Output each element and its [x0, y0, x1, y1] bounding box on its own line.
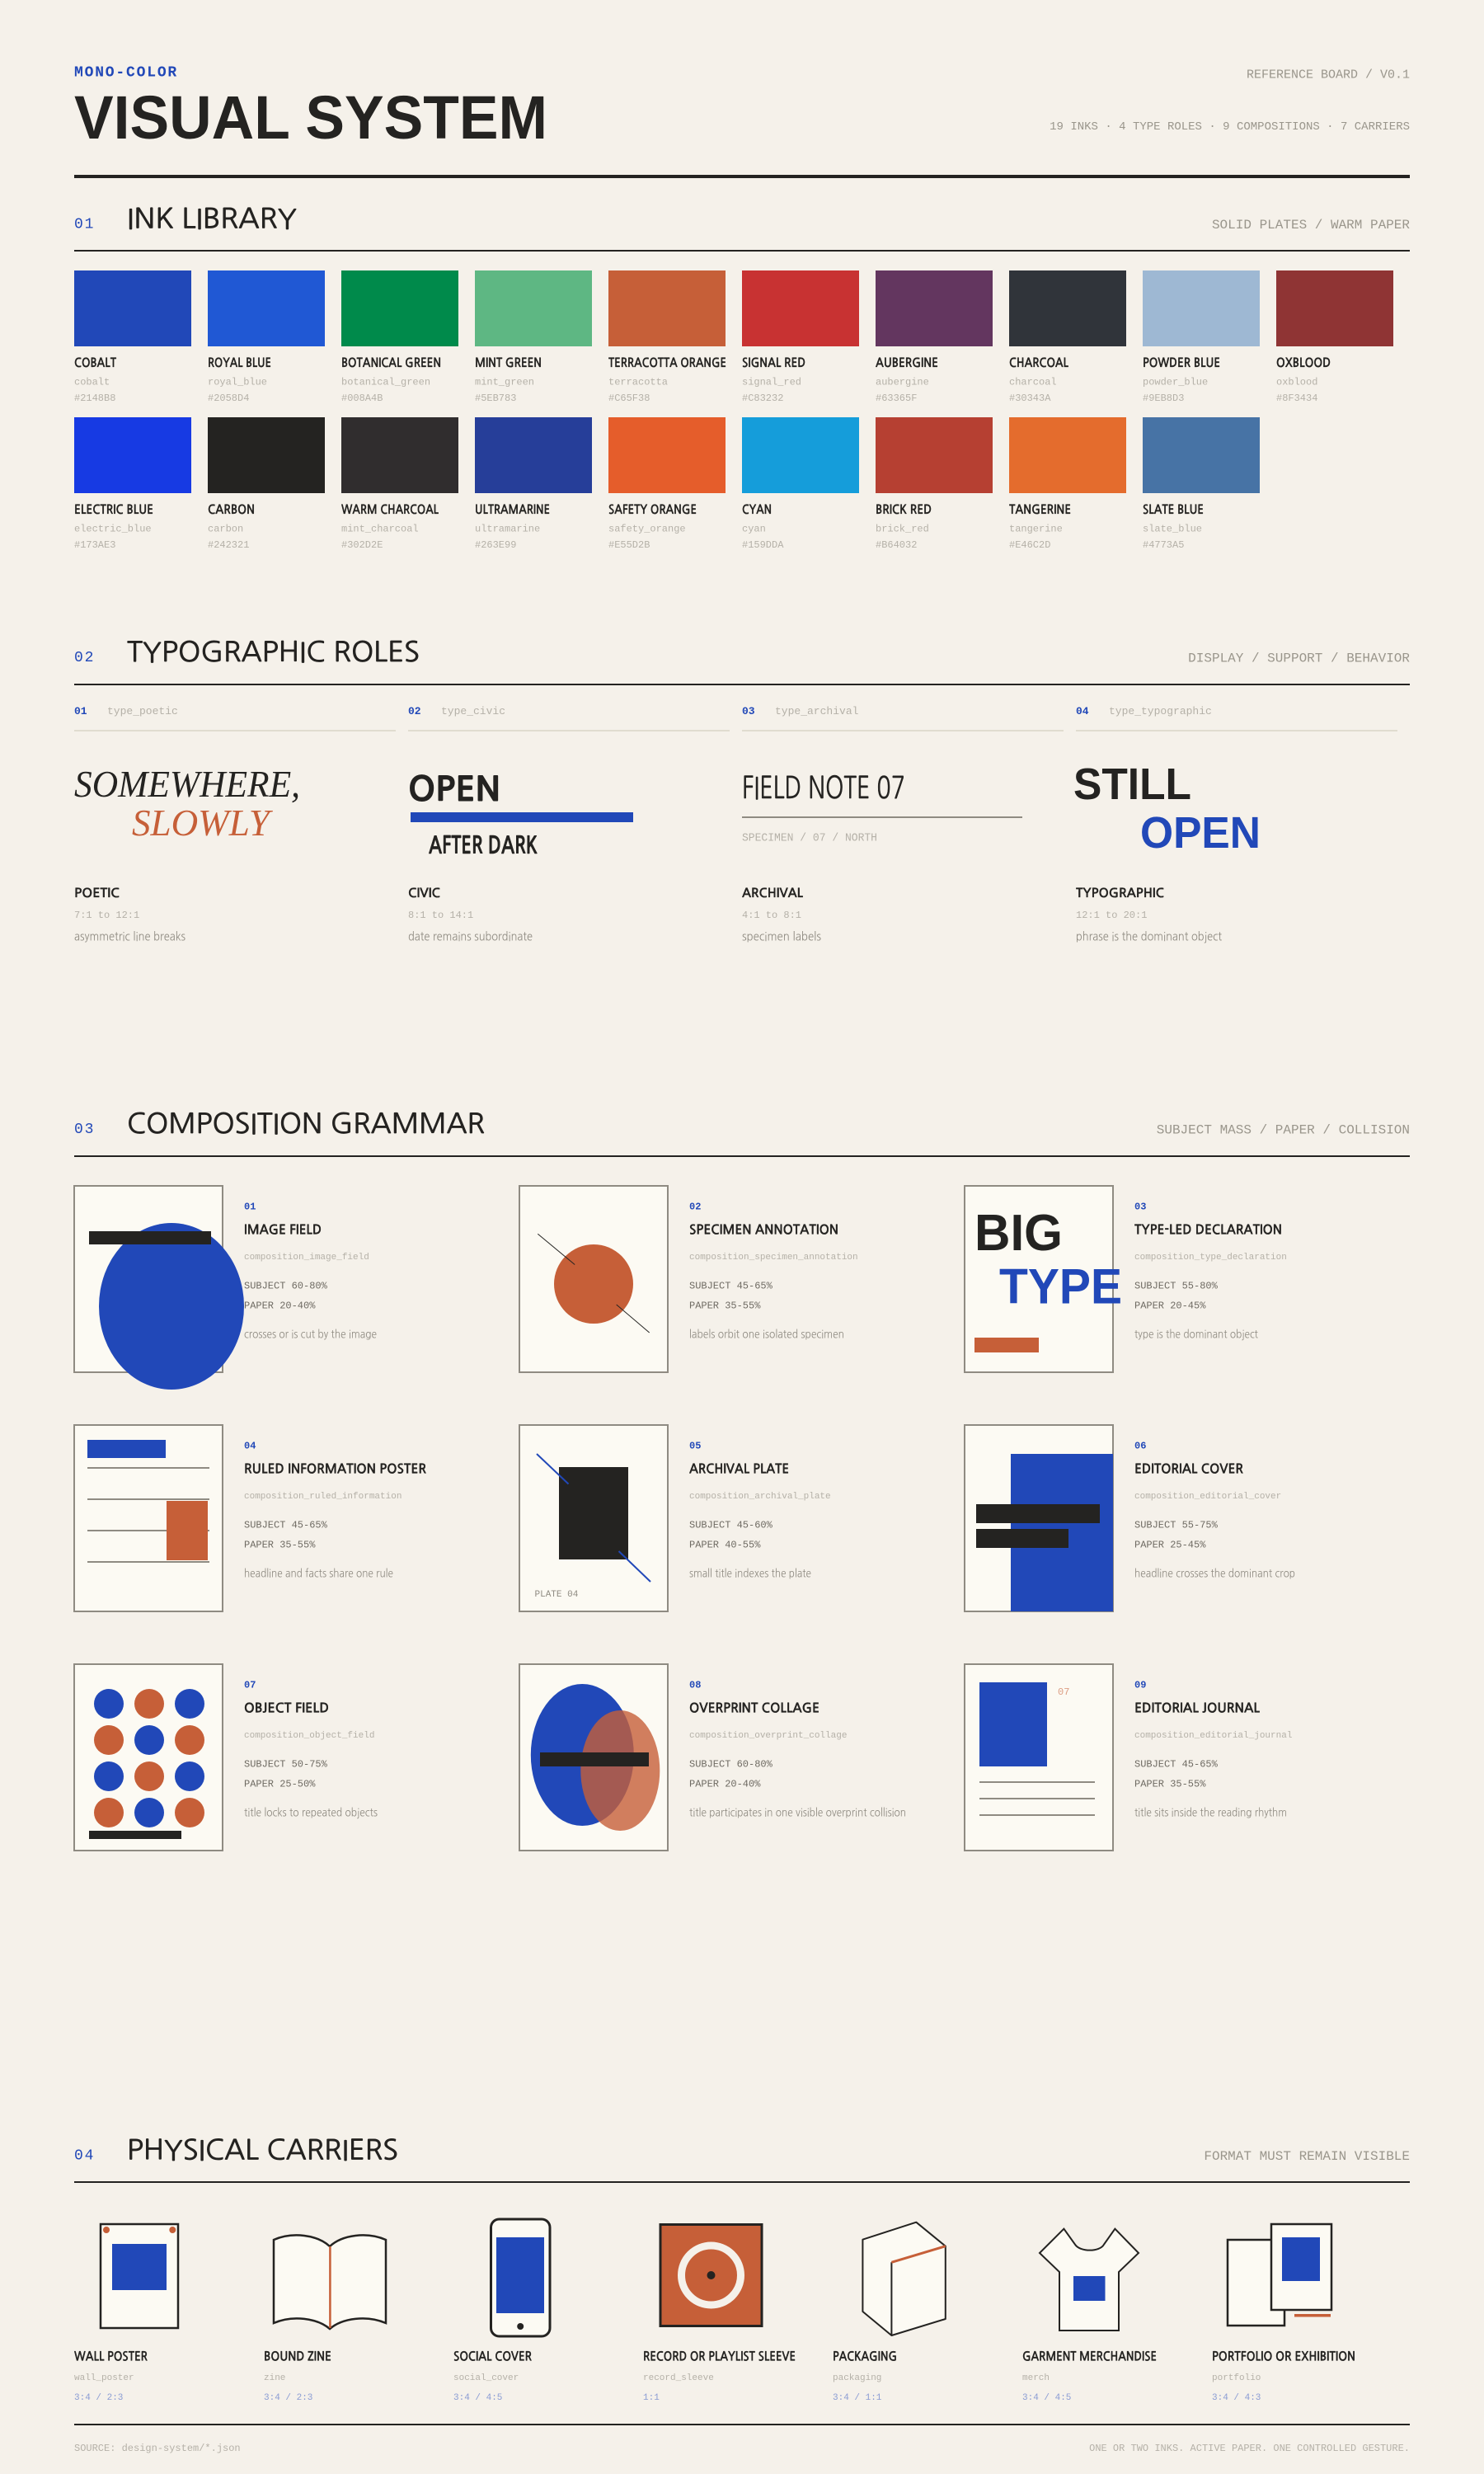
panel: composition 04 ruled information poster: headline and facts share one rule	[244, 1568, 393, 1578]
swatch: cyan	[742, 417, 859, 551]
swatch: botanical green	[341, 270, 458, 404]
swatch: electric blue: ELECTRIC BLUE	[74, 504, 153, 516]
panel: composition 05 archival plate: 05	[689, 1440, 701, 1451]
panel: composition 04 ruled information poster: RULED INFORMATION POSTER	[244, 1464, 426, 1476]
panel: composition 08 overprint collage: PAPER 20-40%	[689, 1778, 761, 1790]
swatch: aubergine	[876, 270, 993, 404]
swatch: mint green	[475, 270, 592, 404]
swatch: charcoal: #30343A	[1009, 393, 1051, 404]
panel: type role typographic: 12:1 to 20:1	[1076, 910, 1147, 921]
panel: type role poetic: type_poetic	[107, 705, 178, 717]
swatch: carbon: #242321	[208, 539, 249, 551]
swatch: oxblood: OXBLOOD	[1276, 357, 1331, 369]
swatch: charcoal	[1009, 270, 1126, 404]
specimen: field note 07	[742, 773, 1022, 844]
panel: type role civic: type_civic	[441, 705, 505, 717]
section heading: physical carriers	[74, 2136, 1410, 2164]
panel: composition 03 type-led declaration: SUBJECT 55-80%	[1134, 1280, 1219, 1291]
panel: composition 04 ruled information poster	[74, 1425, 426, 1611]
panel: type role civic: CIVIC	[408, 887, 440, 900]
panel: type role archival	[742, 705, 1064, 943]
panel: type role poetic	[74, 705, 396, 943]
specimen: somewhere slowly: SLOWLY	[132, 802, 273, 844]
panel: type role civic: 8:1 to 14:1	[408, 910, 473, 921]
panel: carrier bound zine: 3:4 / 2:3	[264, 2393, 312, 2403]
swatch: oxblood: oxblood	[1276, 376, 1317, 388]
panel: composition 02 specimen annotation: labels orbit one isolated specimen	[689, 1329, 844, 1339]
section heading: typographic roles: TYPOGRAPHIC ROLES	[127, 638, 420, 666]
swatch: slate blue	[1143, 417, 1260, 551]
swatch: slate blue: #4773A5	[1143, 539, 1184, 551]
panel: composition 05 archival plate: composition_archival_plate	[689, 1492, 831, 1502]
specimen: field note 07: FIELD NOTE 07	[742, 773, 905, 803]
panel: type role civic	[408, 705, 730, 943]
panel: type role poetic: POETIC	[74, 887, 120, 900]
swatch: brick red: BRICK RED	[876, 504, 932, 516]
swatch: royal blue	[208, 270, 325, 404]
section heading: typographic roles: DISPLAY / SUPPORT / BEHAVIOR	[1188, 651, 1410, 666]
panel: carrier garment merchandise: GARMENT MERCHANDISE	[1022, 2351, 1157, 2363]
thumbnail: editorial cover	[965, 1425, 1113, 1611]
panel: composition 03 type-led declaration: composition_type_declaration	[1134, 1253, 1287, 1263]
panel: composition 01 image field: crosses or is cut by the image	[244, 1329, 377, 1339]
panel: carrier social cover	[453, 2219, 550, 2403]
swatch: warm charcoal: #302D2E	[341, 539, 383, 551]
swatch: mint green: MINT GREEN	[475, 357, 542, 369]
swatch: signal red: signal_red	[742, 376, 801, 388]
specimen: open after dark: AFTER DARK	[429, 835, 538, 858]
panel: composition 03 type-led declaration: 03	[1134, 1201, 1146, 1212]
panel: composition 05 archival plate: ARCHIVAL PLATE	[689, 1464, 789, 1476]
panel: carrier garment merchandise: merch	[1022, 2373, 1050, 2383]
panel: composition 07 object field: title locks to repeated objects	[244, 1807, 378, 1818]
swatch: mint green: mint_green	[475, 376, 534, 388]
section heading: composition grammar: COMPOSITION GRAMMAR	[127, 1110, 485, 1137]
section heading: composition grammar: SUBJECT MASS / PAPER / COLLISION	[1157, 1123, 1410, 1138]
panel: composition 02 specimen annotation: composition_specimen_annotation	[689, 1253, 858, 1263]
panel: carrier record sleeve: record_sleeve	[643, 2373, 714, 2383]
eyebrow: mono-color: MONO-COLOR	[74, 64, 178, 81]
panel: type role poetic: asymmetric line breaks	[74, 930, 186, 943]
swatch: signal red	[742, 270, 859, 404]
panel: composition 02 specimen annotation: 02	[689, 1201, 701, 1212]
swatch: slate blue: SLATE BLUE	[1143, 504, 1204, 516]
swatch: electric blue: #173AE3	[74, 539, 115, 551]
swatch: powder blue: #9EB8D3	[1143, 393, 1184, 404]
thumbnail: archival plate	[519, 1425, 668, 1611]
swatch: cobalt: #2148B8	[74, 393, 115, 404]
swatch: ultramarine: #263E99	[475, 539, 516, 551]
swatch: charcoal: charcoal	[1009, 376, 1057, 388]
swatch: signal red: #C83232	[742, 393, 783, 404]
swatch: terracotta orange: #C65F38	[608, 393, 650, 404]
swatch: terracotta orange: TERRACOTTA ORANGE	[608, 357, 726, 369]
panel: composition 07 object field: 07	[244, 1679, 256, 1691]
section heading: ink library: 01	[74, 216, 95, 233]
swatch: botanical green: BOTANICAL GREEN	[341, 357, 441, 369]
panel: carrier wall poster	[74, 2224, 178, 2403]
panel: composition 01 image field: SUBJECT 60-80%	[244, 1280, 328, 1291]
panel: composition 01 image field: 01	[244, 1201, 256, 1212]
icon: bound zine	[274, 2235, 386, 2329]
swatch: terracotta orange: terracotta	[608, 376, 668, 388]
panel: carrier bound zine: zine	[264, 2373, 285, 2383]
swatch: carbon	[208, 417, 325, 551]
swatch: cobalt	[74, 270, 191, 404]
swatch: cobalt: cobalt	[74, 376, 110, 388]
swatch: cyan: CYAN	[742, 504, 772, 516]
panel: type role civic: 02	[408, 705, 421, 717]
swatch: brick red	[876, 417, 993, 551]
panel: carrier wall poster: wall_poster	[74, 2373, 134, 2383]
panel: type role archival: type_archival	[775, 705, 859, 717]
footer: ONE OR TWO INKS. ACTIVE PAPER. ONE CONTROLLED GESTURE.	[1089, 2443, 1410, 2454]
thumbnail: ruled information poster	[74, 1425, 223, 1611]
section heading: ink library: INK LIBRARY	[127, 205, 297, 233]
panel: composition 09 editorial journal: 09	[1134, 1679, 1146, 1691]
panel: composition 03 type-led declaration: TYPE-LED DECLARATION	[1134, 1225, 1282, 1237]
panel: type role typographic: TYPOGRAPHIC	[1076, 887, 1164, 900]
header	[74, 64, 1410, 152]
panel: composition 06 editorial cover	[965, 1425, 1295, 1611]
panel: composition 06 editorial cover: EDITORIAL COVER	[1134, 1464, 1243, 1476]
swatch: tangerine: TANGERINE	[1009, 504, 1071, 516]
section heading: typographic roles	[74, 638, 1410, 666]
panel: composition 08 overprint collage: 08	[689, 1679, 701, 1691]
panel: composition 08 overprint collage: SUBJECT 60-80%	[689, 1758, 773, 1770]
swatch: electric blue	[74, 417, 191, 551]
footer: SOURCE: design-system/*.json	[74, 2443, 241, 2454]
panel: carrier packaging: packaging	[833, 2373, 881, 2383]
icon: t-shirt	[1040, 2229, 1139, 2331]
thumbnail: type-led declaration	[965, 1186, 1122, 1372]
panel: carrier portfolio or exhibition: 3:4 / 4:3	[1212, 2393, 1261, 2403]
swatch: terracotta orange	[608, 270, 726, 404]
panel: composition 04 ruled information poster: SUBJECT 45-65%	[244, 1519, 328, 1531]
panel: ink swatches	[74, 270, 1393, 551]
specimen: still open: STILL	[1073, 760, 1191, 809]
swatch: warm charcoal: WARM CHARCOAL	[341, 504, 439, 516]
panel: carrier social cover: SOCIAL COVER	[453, 2351, 533, 2363]
icon: package box	[862, 2222, 946, 2335]
section heading: ink library: SOLID PLATES / WARM PAPER	[1212, 218, 1410, 233]
panel: composition 09 editorial journal: title sits inside the reading rhythm	[1134, 1807, 1287, 1818]
swatch: tangerine: tangerine	[1009, 523, 1063, 534]
swatch: tangerine: #E46C2D	[1009, 539, 1050, 551]
swatch: powder blue: powder_blue	[1143, 376, 1208, 388]
panel: composition 07 object field: OBJECT FIELD	[244, 1703, 329, 1715]
panel: carrier social cover: social_cover	[453, 2373, 519, 2383]
panel: type role archival: 4:1 to 8:1	[742, 910, 801, 921]
panel: composition 04 ruled information poster: composition_ruled_information	[244, 1492, 402, 1502]
panel: composition 05 archival plate	[519, 1425, 831, 1611]
panel: carrier wall poster: WALL POSTER	[74, 2351, 148, 2363]
panel: composition 06 editorial cover: PAPER 25-45%	[1134, 1539, 1206, 1550]
section heading: physical carriers: PHYSICAL CARRIERS	[127, 2136, 398, 2164]
swatch: brick red: #B64032	[876, 539, 917, 551]
thumbnail: archival plate: PLATE 04	[534, 1590, 579, 1600]
panel: carrier garment merchandise	[1022, 2229, 1157, 2403]
panel: carrier portfolio or exhibition: PORTFOLIO OR EXHIBITION	[1212, 2351, 1355, 2363]
section heading: composition grammar	[74, 1110, 1410, 1138]
panel: composition 02 specimen annotation: PAPER 35-55%	[689, 1300, 761, 1311]
panel: carrier bound zine	[264, 2235, 386, 2403]
section heading: ink library	[74, 205, 1410, 233]
icon: portfolio sheets	[1228, 2224, 1331, 2326]
panel: composition 08 overprint collage: composition_overprint_collage	[689, 1731, 847, 1741]
thumbnail: specimen annotation	[519, 1186, 668, 1372]
panel: carrier packaging: 3:4 / 1:1	[833, 2393, 882, 2403]
swatch: warm charcoal	[341, 417, 458, 551]
panel: carrier portfolio or exhibition	[1212, 2224, 1355, 2403]
version note: REFERENCE BOARD / V0.1	[1247, 68, 1410, 82]
panel: composition 06 editorial cover: composition_editorial_cover	[1134, 1492, 1281, 1502]
swatch: electric blue: electric_blue	[74, 523, 152, 534]
swatch: tangerine	[1009, 417, 1126, 551]
panel: carrier record sleeve	[643, 2225, 796, 2403]
panel: carrier packaging	[833, 2222, 946, 2403]
swatch: cyan: cyan	[742, 523, 766, 534]
swatch: cyan: #159DDA	[742, 539, 784, 551]
panel: composition 01 image field	[74, 1186, 377, 1390]
panel: composition 04 ruled information poster: 04	[244, 1440, 256, 1451]
panel: composition 05 archival plate: PAPER 40-55%	[689, 1539, 761, 1550]
panel: carrier wall poster: 3:4 / 2:3	[74, 2393, 123, 2403]
panel: type role poetic: 01	[74, 705, 87, 717]
swatch: safety orange	[608, 417, 726, 551]
panel: composition 06 editorial cover: headline crosses the dominant crop	[1134, 1568, 1295, 1578]
panel: composition 08 overprint collage: title participates in one visible overprint collision	[689, 1807, 906, 1818]
swatch: oxblood	[1276, 270, 1393, 404]
section heading: typographic roles: 02	[74, 650, 95, 666]
panel: composition 07 object field: SUBJECT 50-75%	[244, 1758, 328, 1770]
panel: carrier packaging: PACKAGING	[833, 2351, 897, 2363]
panel: composition 02 specimen annotation: SPECIMEN ANNOTATION	[689, 1225, 838, 1237]
panel: carrier portfolio or exhibition: portfolio	[1212, 2373, 1261, 2383]
panel: composition 01 image field: PAPER 20-40%	[244, 1300, 316, 1311]
specimen: field note 07: SPECIMEN / 07 / NORTH	[742, 831, 877, 844]
panel: composition 08 overprint collage: OVERPRINT COLLAGE	[689, 1703, 819, 1715]
panel: carrier social cover: 3:4 / 4:5	[453, 2393, 502, 2403]
panel: composition 01 image field: IMAGE FIELD	[244, 1225, 322, 1237]
panel: composition 03 type-led declaration: PAPER 20-45%	[1134, 1300, 1206, 1311]
swatch: carbon: CARBON	[208, 504, 255, 516]
panel: composition 07 object field	[74, 1664, 378, 1851]
swatch: aubergine: aubergine	[876, 376, 929, 388]
swatch: carbon: carbon	[208, 523, 243, 534]
panel: type role poetic: 7:1 to 12:1	[74, 910, 139, 921]
icon: phone	[491, 2219, 550, 2336]
specimen: open after dark: OPEN	[408, 773, 500, 806]
specimen: still open	[1073, 760, 1261, 858]
swatch: brick red: brick_red	[876, 523, 929, 534]
swatch: safety orange: safety_orange	[608, 523, 686, 534]
panel: type role typographic	[1073, 705, 1397, 943]
panel: carrier garment merchandise: 3:4 / 4:5	[1022, 2393, 1071, 2403]
panel: type role archival: 03	[742, 705, 755, 717]
inventory note: 19 INKS · 4 TYPE ROLES · 9 COMPOSITIONS · 7 CARRIERS	[1050, 120, 1410, 134]
icon: record sleeve	[660, 2225, 762, 2326]
swatch: oxblood: #8F3434	[1276, 393, 1317, 404]
panel: composition 03 type-led declaration	[965, 1186, 1287, 1372]
panel: composition 04 ruled information poster: PAPER 35-55%	[244, 1539, 316, 1550]
thumbnail: editorial journal: 07	[1058, 1686, 1069, 1698]
panel: type role archival: ARCHIVAL	[742, 887, 804, 900]
specimen: still open: OPEN	[1140, 808, 1261, 858]
panel: composition 01 image field: composition_image_field	[244, 1253, 369, 1263]
title: VISUAL SYSTEM	[74, 83, 547, 152]
panel: type role typographic: 04	[1076, 705, 1089, 717]
swatch: ultramarine: ultramarine	[475, 523, 540, 534]
swatch: warm charcoal: mint_charcoal	[341, 523, 419, 534]
swatch: ultramarine: ULTRAMARINE	[475, 504, 550, 516]
swatch: botanical green: #008A4B	[341, 393, 383, 404]
swatch: aubergine: AUBERGINE	[876, 357, 938, 369]
specimen: somewhere slowly	[74, 763, 300, 844]
swatch: royal blue: ROYAL BLUE	[208, 357, 271, 369]
swatch: royal blue: royal_blue	[208, 376, 267, 388]
icon: wall poster	[101, 2224, 178, 2328]
panel: carrier record sleeve: RECORD OR PLAYLIST SLEEVE	[643, 2351, 796, 2363]
panel: carrier record sleeve: 1:1	[643, 2393, 660, 2403]
swatch: safety orange: SAFETY ORANGE	[608, 504, 697, 516]
swatch: cobalt: COBALT	[74, 357, 117, 369]
panel: composition 05 archival plate: small title indexes the plate	[689, 1568, 811, 1578]
panel: composition 08 overprint collage	[519, 1664, 906, 1851]
panel: composition 06 editorial cover: 06	[1134, 1440, 1146, 1451]
panel: composition 09 editorial journal: composition_editorial_journal	[1134, 1731, 1292, 1741]
thumbnail: object field	[74, 1664, 223, 1851]
panel: composition 02 specimen annotation: SUBJECT 45-65%	[689, 1280, 773, 1291]
swatch: aubergine: #63365F	[876, 393, 917, 404]
panel: type role typographic: type_typographic	[1109, 705, 1212, 717]
panel: type role typographic: phrase is the dominant object	[1076, 930, 1223, 943]
panel: type role archival: specimen labels	[742, 930, 821, 943]
thumbnail: image field	[74, 1186, 244, 1390]
panel: composition 09 editorial journal: SUBJECT 45-65%	[1134, 1758, 1219, 1770]
panel: composition 09 editorial journal: EDITORIAL JOURNAL	[1134, 1703, 1260, 1715]
footer	[74, 2443, 1410, 2454]
panel: composition 06 editorial cover: SUBJECT 55-75%	[1134, 1519, 1219, 1531]
swatch: charcoal: CHARCOAL	[1009, 357, 1069, 369]
section heading: composition grammar: 03	[74, 1122, 95, 1138]
section heading: physical carriers: 04	[74, 2147, 95, 2164]
thumbnail: type-led declaration: TYPE	[999, 1258, 1122, 1315]
swatch: ultramarine	[475, 417, 592, 551]
panel: type role civic: date remains subordinate	[408, 930, 533, 943]
panel: composition 09 editorial journal: PAPER 35-55%	[1134, 1778, 1206, 1790]
specimen: open after dark	[408, 773, 633, 858]
panel: composition 02 specimen annotation	[519, 1186, 858, 1372]
swatch: signal red: SIGNAL RED	[742, 357, 805, 369]
thumbnail: editorial journal	[965, 1664, 1113, 1851]
swatch: powder blue: POWDER BLUE	[1143, 357, 1220, 369]
panel: composition 07 object field: composition_object_field	[244, 1731, 374, 1741]
thumbnail: overprint collage	[519, 1664, 668, 1851]
swatch: botanical green: botanical_green	[341, 376, 430, 388]
panel: composition 05 archival plate: SUBJECT 45-60%	[689, 1519, 773, 1531]
thumbnail: type-led declaration: BIG	[974, 1205, 1063, 1262]
panel: composition 07 object field: PAPER 25-50%	[244, 1778, 316, 1790]
swatch: slate blue: slate_blue	[1143, 523, 1202, 534]
specimen: somewhere slowly: SOMEWHERE,	[74, 763, 300, 805]
swatch: powder blue	[1143, 270, 1260, 404]
section heading: physical carriers: FORMAT MUST REMAIN VISIBLE	[1204, 2149, 1410, 2164]
panel: composition 09 editorial journal	[965, 1664, 1292, 1851]
swatch: mint green: #5EB783	[475, 393, 516, 404]
swatch: safety orange: #E55D2B	[608, 539, 650, 551]
panel: composition 03 type-led declaration: type is the dominant object	[1134, 1329, 1258, 1340]
panel: carrier bound zine: BOUND ZINE	[264, 2351, 331, 2363]
swatch: royal blue: #2058D4	[208, 393, 249, 404]
